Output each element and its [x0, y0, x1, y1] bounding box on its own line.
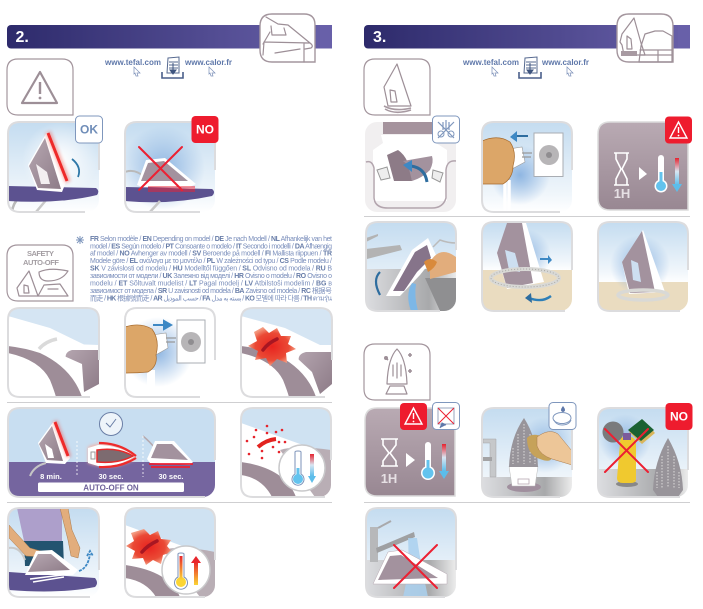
iron upright 8 min [38, 421, 70, 464]
red cross [394, 545, 437, 588]
iron upright [622, 230, 665, 294]
tap [370, 521, 415, 562]
iron tilted [386, 238, 436, 296]
arrow: pull out [153, 321, 171, 329]
header bar: section 2 [7, 25, 332, 48]
button [377, 167, 390, 180]
arrow: open [411, 166, 427, 182]
panel: unplug, left arrow [482, 122, 572, 212]
text block: depending on model: af model / NO Avhenger av modell / SV Beroende på modell / FI Mallista riippuen / TR [90, 250, 332, 258]
hand [537, 432, 572, 465]
icon: safety auto-off box: AUTO-OFF [23, 258, 59, 267]
button [432, 170, 443, 182]
panel: coil cord around iron [482, 222, 572, 311]
icon: safety auto-off box [7, 245, 73, 301]
panel: indicator flashing, cooling [241, 408, 331, 497]
triangle [406, 453, 415, 467]
icon: download document [519, 57, 541, 78]
divider line [7, 502, 332, 503]
panel: iron upright OK [8, 116, 102, 212]
time label: 30 sec. [98, 472, 124, 481]
panel: iron stored with cord [598, 222, 688, 311]
arrow down [672, 158, 682, 192]
url row, section 3: www.calor.fr [541, 58, 589, 67]
header bar: section 3 [364, 25, 690, 48]
thermometer [421, 442, 435, 480]
text block: depending on model: 而走 / HK 根據號而走 / AR حسب الموديل / FA بسته به مدل / KO 모델에 따라 다름 / TH ตามรุ่น [90, 294, 332, 302]
icon: warning box [7, 59, 73, 115]
icon: iron on base box [364, 59, 430, 115]
sponge [527, 435, 552, 461]
badge: NO: NO [670, 410, 688, 424]
text block: depending on model: model / ES Según modelo / PT Consoante o modelo / IT Secondo i modelli / DA Afhængig [90, 244, 332, 250]
red burst [126, 529, 172, 565]
icon: hourglass [381, 439, 398, 466]
panel: wait 1H, unplugged [365, 402, 460, 496]
arrow: tilt [72, 159, 79, 177]
section number 2: 2. [16, 29, 29, 46]
arrow: lift [79, 551, 93, 571]
arrow: right [540, 258, 549, 260]
panel: indicator lit [241, 308, 332, 397]
plug [155, 332, 168, 355]
url row, section 2 [104, 57, 232, 78]
badge: warning [665, 116, 692, 144]
cord holder [387, 150, 412, 181]
tap [483, 439, 496, 477]
text block: depending on model: зависимости от модели / UK Залежно від моделі / HR Ovisno o modelu / RO Ovisno o [90, 272, 332, 280]
coiled cord [618, 290, 668, 300]
iron flat [137, 158, 196, 187]
icon: iron and folded shirt thumbnail [617, 14, 673, 62]
cord [149, 370, 153, 397]
icon: safety auto-off box: SAFETY [27, 249, 54, 258]
heating thermometer [162, 546, 210, 594]
badge: sponge with water [549, 402, 576, 430]
red cross [605, 429, 648, 472]
icon: hourglass [614, 153, 629, 185]
iron flat 30 sec [143, 436, 193, 467]
badge: no dishwasher brush [432, 116, 460, 143]
auto-off on bar [38, 482, 184, 492]
socket [534, 133, 563, 176]
panel: no abrasives [598, 403, 692, 497]
divider line [7, 402, 332, 403]
icon: cursor [134, 67, 140, 76]
indicator pill [39, 339, 57, 349]
water [403, 538, 428, 597]
icon: download document [162, 57, 183, 78]
dashed separators [77, 436, 143, 477]
person [9, 508, 80, 566]
soleplate [509, 418, 538, 467]
iron upright [497, 223, 544, 289]
icon: ironing thumbnail [260, 14, 315, 62]
panel: emptying over sink [366, 222, 456, 311]
panel: wait 1H to cool [598, 116, 692, 210]
arrow: pull out [516, 135, 528, 137]
auto-off on bar: AUTO-OFF ON [83, 484, 139, 492]
panel: iron flat NO [121, 116, 218, 212]
panel: auto-off timeline [8, 408, 215, 498]
grey scouring pad [602, 422, 624, 442]
badge: no socket [432, 402, 460, 430]
panel: base closeup [365, 116, 460, 212]
water [408, 283, 418, 311]
badge: NO: NO [196, 122, 214, 136]
url row, section 3 [462, 57, 589, 78]
panel: indicator lit, heating [125, 508, 215, 597]
panel: unplug, right arrow [123, 308, 215, 397]
text block: depending on model: зависимост от модела / SR U zavisnosti od modela / BA Zavisno od modela / RC 根据号 [90, 286, 332, 295]
cord [505, 180, 509, 212]
section number 3: 3. [373, 29, 386, 46]
red cross [139, 147, 182, 190]
coiled cord [491, 269, 559, 287]
red burst [248, 327, 296, 366]
divider line [364, 502, 690, 503]
icon: cursor [567, 67, 573, 76]
text block: depending on model: SK V závislosti od modelu / HU Modelltől függően / SL Odvisno od modela / RU В [90, 266, 332, 272]
yellow bottle [617, 433, 636, 483]
arrow: tilt [376, 272, 380, 295]
triangle [639, 167, 647, 180]
url row, section 3: www.tefal.com [462, 58, 519, 67]
icon: cursor [492, 67, 498, 76]
divider line [364, 216, 690, 217]
white tray [373, 135, 447, 201]
clock [100, 412, 122, 436]
thermometer [654, 155, 668, 192]
url row, section 2: www.calor.fr [184, 58, 232, 67]
text block: depending on model: modelu / ET Sõltuvalt mudelist / LT Pagal modelį / LV Atbilstoši modelim / BG в [90, 280, 332, 288]
ironing board [9, 572, 97, 591]
panel: person ironing [8, 508, 99, 597]
iron handle [298, 352, 332, 394]
time label: 8 min. [40, 472, 62, 481]
arrow: wrap around [529, 296, 551, 300]
text block: depending on model: Modele göre / EL ανάλογα με το μοντέλο / PL W zależności od typu / CS Podle modelu / [90, 257, 332, 265]
iron upright [28, 132, 68, 192]
iron soleplate 30 sec [88, 443, 137, 467]
hand [482, 138, 514, 184]
flashing indicator [246, 425, 286, 459]
icon: iron front with sparkles box [364, 344, 430, 400]
iron base [507, 482, 541, 492]
text block: depending on model: FR Selon modèle / EN Depending on model / DE Je nach Modell / NL Afhankelijk van het [90, 236, 332, 243]
green scouring sponge [628, 419, 655, 444]
iron [25, 550, 78, 582]
badge: OK: OK [80, 122, 98, 136]
plug [509, 147, 525, 169]
text block: depending on model [90, 236, 332, 302]
1H label: 1H [614, 186, 630, 201]
time label: 30 sec. [158, 472, 184, 481]
badge: warning [400, 403, 427, 430]
url row, section 2: www.tefal.com [104, 58, 161, 67]
1H label: 1H [381, 471, 397, 486]
panel: no rinsing under tap [366, 508, 456, 597]
soleplate [653, 438, 683, 497]
icon: sparkle note marker [76, 236, 84, 244]
arrow down [439, 444, 449, 479]
socket [177, 320, 205, 363]
cooling thermometer [279, 445, 325, 491]
iron handle [66, 350, 99, 392]
icon: cursor [209, 67, 215, 76]
hand [125, 325, 157, 373]
panel: handle closeup [8, 308, 99, 397]
panel: clean soleplate with sponge [482, 402, 576, 497]
iron flat [373, 550, 447, 584]
hand [430, 252, 456, 279]
